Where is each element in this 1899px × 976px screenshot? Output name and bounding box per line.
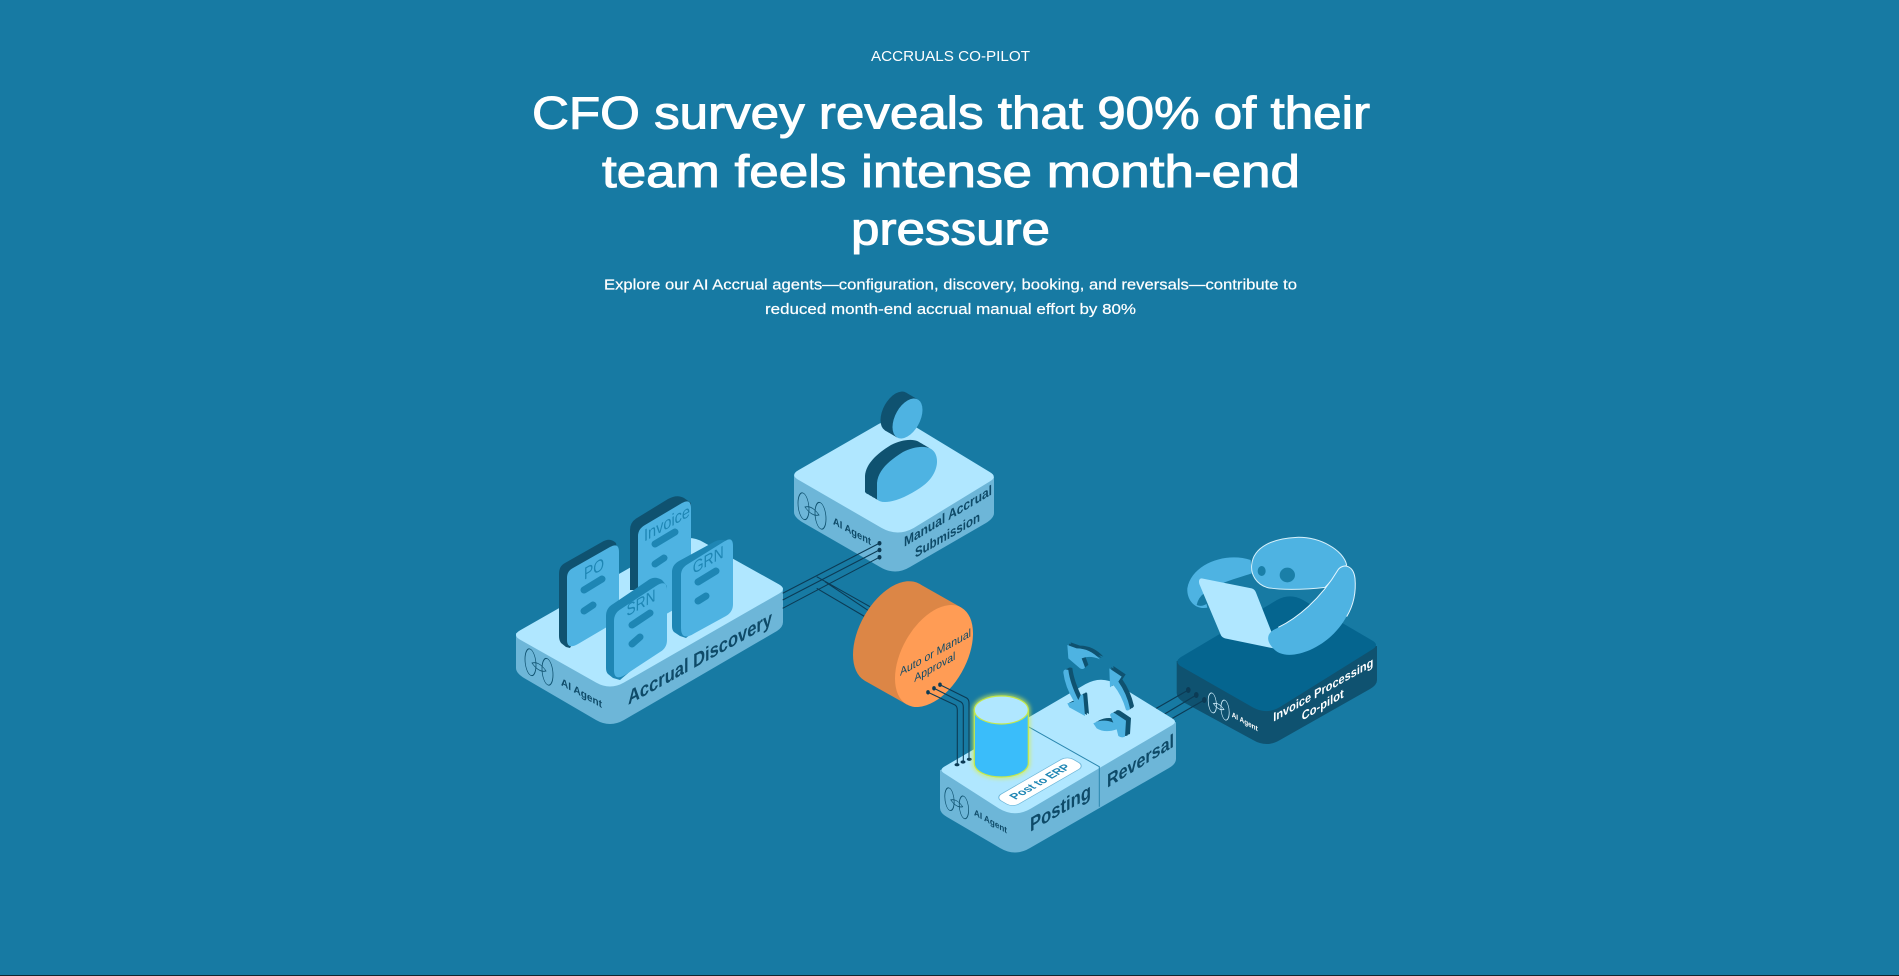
label: Manual Accrual Submission: Submission: [915, 509, 980, 562]
panel: invoice processing co-pilot platform: [1177, 596, 1377, 744]
icon: person: [865, 378, 937, 502]
label: Manual Accrual Submission: [904, 482, 992, 562]
arrow: bottom: [1093, 710, 1131, 737]
label: Reversal: Reversal: [1107, 730, 1174, 793]
icon: AI agent logo: [798, 490, 826, 532]
icon: PO document: PO: [584, 553, 604, 584]
header text: [532, 48, 1370, 318]
title: [532, 88, 1370, 254]
icon: Invoice document: Invoice: [644, 500, 690, 545]
label: Invoice Processing Co-pilot: Co-pilot: [1302, 686, 1344, 723]
panel: manual accrual submission platform: [794, 420, 994, 572]
icon: SRN document: SRN: [626, 585, 656, 620]
icon: robot with laptop: [1187, 537, 1355, 655]
label: AI Agent: AI Agent: [1232, 710, 1258, 733]
label: AI Agent: AI Agent: [561, 677, 602, 711]
icon: AI agent logo: [945, 786, 969, 821]
panel: posting and reversal platform: [940, 680, 1176, 852]
label: Manual Accrual Submission: Manual Accrual: [904, 482, 992, 551]
connector lines: reversal to invoice co-pilot: [1150, 687, 1207, 722]
icon: Invoice document: [630, 496, 691, 630]
label: Posting: Posting: [1030, 778, 1091, 837]
title: CFO survey reveals that 90% of their: [532, 88, 1370, 138]
icon: SRN document: [606, 578, 667, 680]
connector lines: discovery to manual submission: [783, 541, 882, 608]
icon: ERP database cylinder: [974, 696, 1028, 777]
icon: PO document: [559, 540, 619, 648]
title: team feels intense month-end: [602, 146, 1300, 197]
connector lines: approval to posting: [926, 682, 972, 766]
eyes: [1258, 566, 1295, 582]
icon: AI agent logo: [525, 646, 553, 688]
label: Post to ERP pill: Post to ERP: [1006, 762, 1074, 801]
label: Auto or Manual Approval: Auto or Manual: [900, 626, 971, 679]
icon: GRN document: [672, 539, 733, 638]
subtitle: Explore our AI Accrual agents—configuration, discovery, booking, and reversals—contribute to: [604, 276, 1297, 294]
back arm: [1187, 557, 1252, 608]
label: Invoice Processing Co-pilot: Invoice Processing: [1273, 655, 1373, 724]
front arm: [1268, 566, 1355, 655]
label: Auto or Manual Approval: Approval: [914, 649, 955, 685]
label: AI Agent: AI Agent: [833, 516, 871, 548]
head: [1252, 537, 1347, 589]
title: pressure: [851, 204, 1050, 254]
panel: accrual discovery platform: [516, 538, 783, 724]
subtitle: reduced month-end accrual manual effort by 80%: [765, 301, 1136, 318]
arrow: right: [1109, 666, 1134, 711]
label: Accrual Discovery: Accrual Discovery: [628, 607, 772, 710]
icon: auto or manual approval cylinder: [853, 540, 973, 749]
laptop: [1199, 578, 1278, 649]
connector lines: to approval: [817, 577, 870, 618]
label: AI Agent: AI Agent: [974, 808, 1008, 837]
label: Post to ERP pill: [995, 756, 1085, 807]
arrow: left: [1063, 668, 1089, 716]
arrow: top: [1067, 642, 1103, 669]
icon: AI agent logo: [1208, 691, 1229, 722]
kicker: ACCRUALS CO-PILOT: [871, 48, 1030, 65]
subtitle: [604, 276, 1297, 318]
icon: GRN document: GRN: [693, 541, 724, 578]
icon: reversal cycle arrows: [1063, 642, 1134, 737]
